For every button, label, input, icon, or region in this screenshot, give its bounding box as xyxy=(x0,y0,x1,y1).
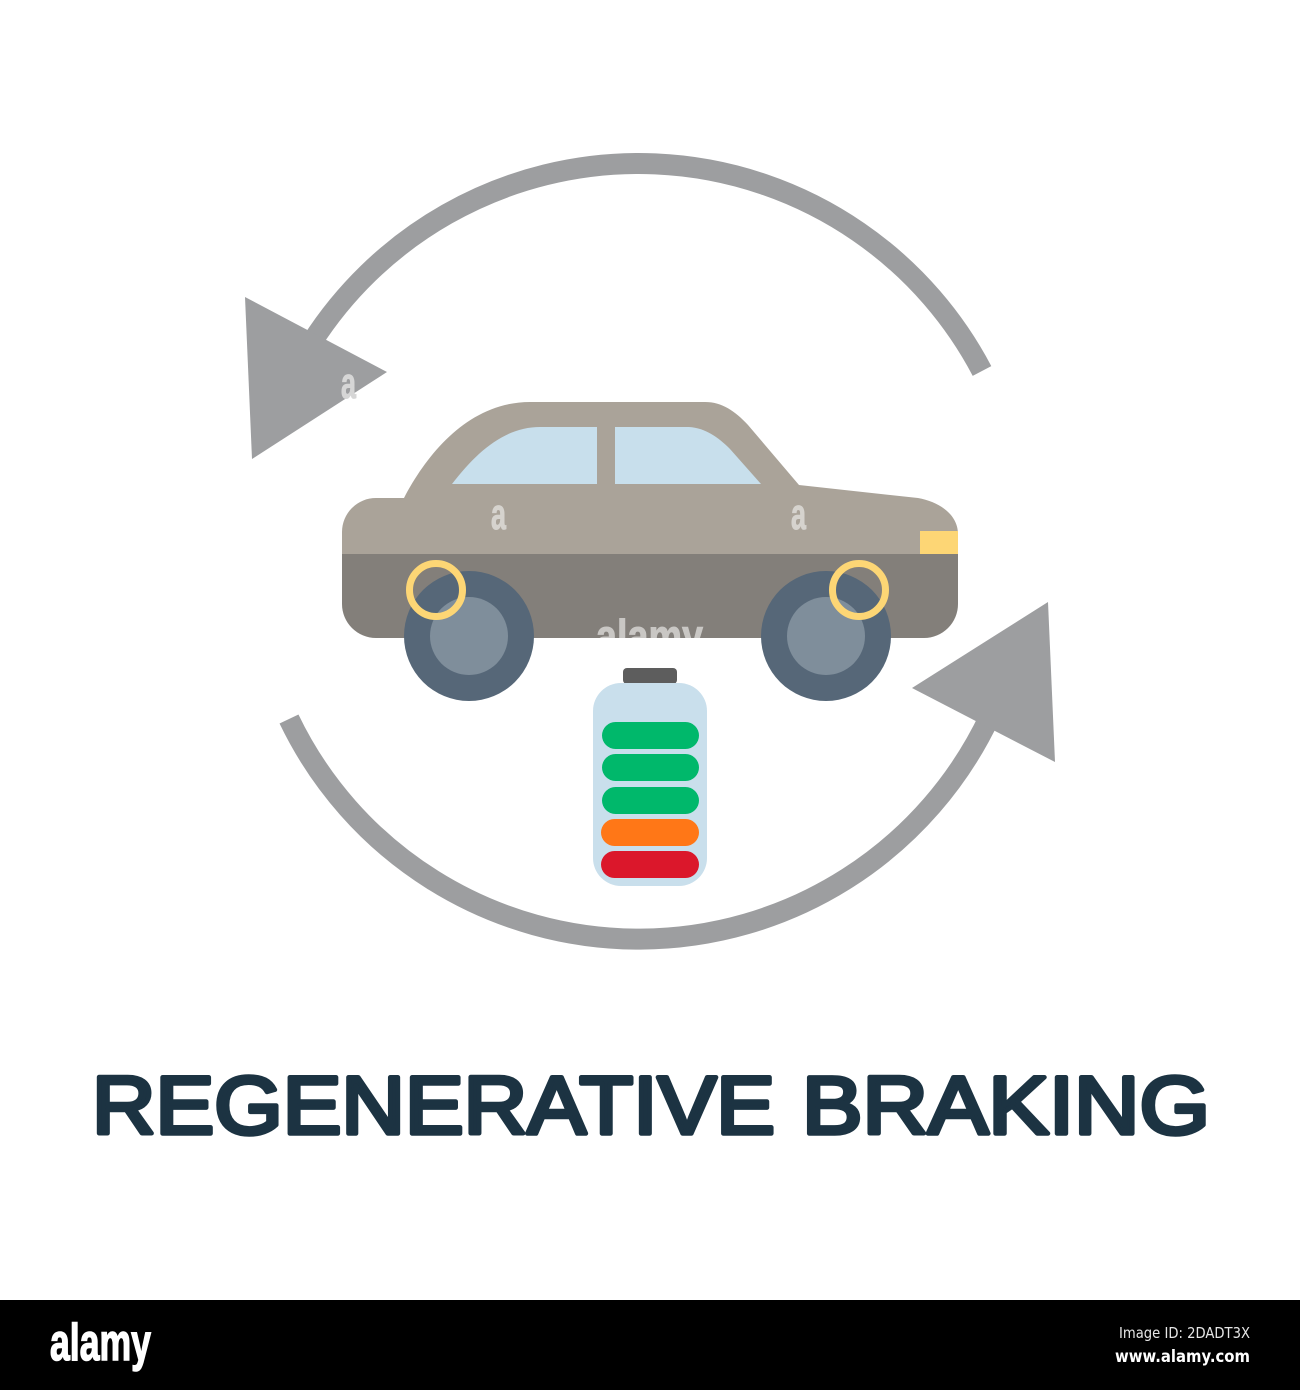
arrow: top cycle arc xyxy=(245,164,982,459)
car upper body xyxy=(342,402,958,554)
watermark letters: a xyxy=(791,490,806,539)
red cell xyxy=(601,851,699,878)
battery body xyxy=(593,683,707,886)
green cell 2 xyxy=(602,754,699,781)
icon: car xyxy=(342,402,958,701)
icon: battery xyxy=(593,668,707,886)
watermark letters xyxy=(491,490,806,539)
green cell 1 xyxy=(602,722,699,749)
front yellow ring xyxy=(832,564,886,616)
front wheel xyxy=(761,571,891,701)
website: www.alamy.com xyxy=(1115,1347,1250,1367)
green cell 3 xyxy=(602,787,699,814)
image id: Image ID: 2DADT3X xyxy=(1119,1324,1250,1342)
car windows xyxy=(452,427,761,484)
headlight xyxy=(920,531,958,554)
rear wheel xyxy=(404,571,534,701)
footer bar xyxy=(0,1300,1300,1390)
title: REGENERATIVE xyxy=(92,1060,775,1152)
title xyxy=(92,1060,1210,1152)
watermark letters: a xyxy=(491,490,506,539)
car lower body xyxy=(342,554,958,638)
rear yellow ring xyxy=(410,564,462,616)
arrow: bottom cycle arc xyxy=(289,602,1055,939)
orange cell xyxy=(601,819,699,846)
title: BRAKING xyxy=(802,1060,1210,1152)
arrow: top cycle arc: a xyxy=(341,359,356,408)
footer logo: alamy xyxy=(50,1314,151,1372)
battery cap xyxy=(623,668,677,684)
